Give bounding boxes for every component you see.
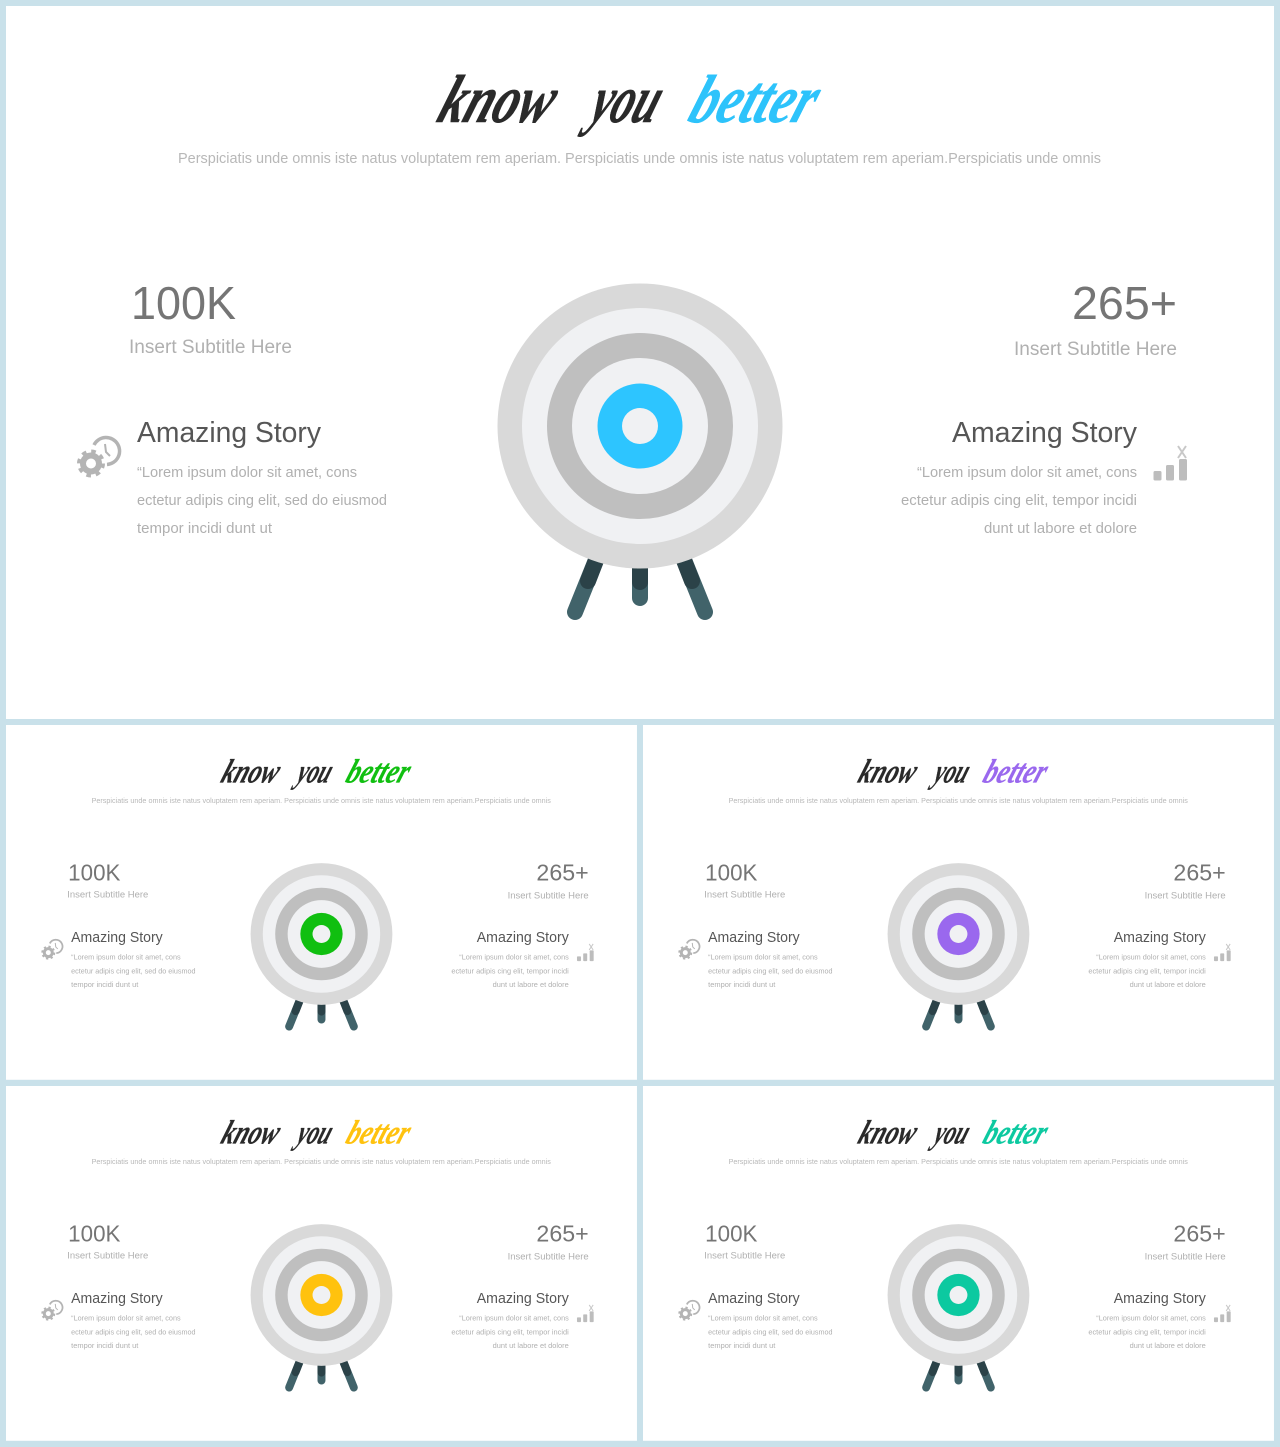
subtitle: Perspiciatis unde omnis iste natus voluptatem rem aperiam. Perspiciatis unde omnis iste natus voluptatem rem aperiam.Perspiciatis unde omnis xyxy=(729,1157,1188,1166)
legs xyxy=(289,1357,354,1388)
story right: “Lorem ipsum dolor sit amet, cons xyxy=(1096,1313,1206,1322)
panel: purple slide xyxy=(643,725,1274,1080)
stat label left: Insert Subtitle Here xyxy=(67,1251,148,1262)
title xyxy=(217,753,417,790)
story left: ectetur adipis cing elit, sed do eiusmod xyxy=(71,966,196,975)
icon: gear and clock xyxy=(42,1301,63,1320)
stat label right: Insert Subtitle Here xyxy=(1014,339,1177,360)
story left: “Lorem ipsum dolor sit amet, cons xyxy=(71,952,181,961)
story right xyxy=(901,417,1137,537)
story right: ectetur adipis cing elit, tempor incidi xyxy=(1088,966,1206,975)
title: you xyxy=(927,753,976,790)
story left: “Lorem ipsum dolor sit amet, cons xyxy=(71,1313,181,1322)
icon: bars xyxy=(1214,944,1231,961)
legs xyxy=(926,996,991,1027)
story right: ectetur adipis cing elit, tempor incidi xyxy=(1088,1327,1206,1336)
story left xyxy=(708,1291,833,1350)
icon: gear and clock xyxy=(42,940,63,959)
story right: Amazing Story xyxy=(1114,1291,1207,1307)
title xyxy=(429,62,831,137)
story left xyxy=(708,930,833,989)
rings xyxy=(498,284,782,568)
icon: gear and clock xyxy=(679,940,700,959)
legs xyxy=(575,550,705,612)
target xyxy=(888,1224,1029,1388)
story right xyxy=(451,930,570,989)
story left: tempor incidi dunt ut xyxy=(708,1341,776,1350)
story right: ectetur adipis cing elit, tempor incidi xyxy=(451,1327,569,1336)
story left: tempor incidi dunt ut xyxy=(71,1341,139,1350)
story right: dunt ut labore et dolore xyxy=(493,980,569,989)
story left: Amazing Story xyxy=(71,1291,164,1307)
title: better xyxy=(680,62,831,137)
story left: Amazing Story xyxy=(137,417,321,449)
stat label right: Insert Subtitle Here xyxy=(1145,891,1226,902)
legs xyxy=(289,996,354,1027)
rings xyxy=(251,863,392,1005)
title: know xyxy=(217,1114,287,1151)
story right: dunt ut labore et dolore xyxy=(1130,1341,1206,1350)
title: know xyxy=(217,753,287,790)
story left: “Lorem ipsum dolor sit amet, cons xyxy=(708,1313,818,1322)
stat label left: Insert Subtitle Here xyxy=(67,890,148,901)
story right: “Lorem ipsum dolor sit amet, cons xyxy=(459,952,569,961)
title: you xyxy=(927,1114,976,1151)
icon: bars xyxy=(1154,446,1187,480)
story left: tempor incidi dunt ut xyxy=(708,980,776,989)
story right xyxy=(1088,930,1207,989)
icon: bars xyxy=(577,1305,594,1322)
legs xyxy=(926,1357,991,1388)
panel: yellow slide xyxy=(6,1086,637,1441)
story right xyxy=(451,1291,570,1350)
story right: Amazing Story xyxy=(952,417,1137,449)
story left xyxy=(137,417,387,537)
story left xyxy=(71,930,196,989)
title: you xyxy=(576,62,675,137)
story left: “Lorem ipsum dolor sit amet, cons xyxy=(708,952,818,961)
title: better xyxy=(342,753,417,790)
target xyxy=(251,863,392,1027)
story right: dunt ut labore et dolore xyxy=(1130,980,1206,989)
stat: 100K: 100K xyxy=(68,860,120,886)
story right: “Lorem ipsum dolor sit amet, cons xyxy=(459,1313,569,1322)
story right: Amazing Story xyxy=(477,1291,570,1307)
icon: bars xyxy=(1214,1305,1231,1322)
title: know xyxy=(429,62,570,137)
panel: blue slide xyxy=(6,6,1274,719)
story right: dunt ut labore et dolore xyxy=(984,520,1137,537)
story right: dunt ut labore et dolore xyxy=(493,1341,569,1350)
story right: Amazing Story xyxy=(477,930,570,946)
story right: Amazing Story xyxy=(1114,930,1207,946)
title: you xyxy=(290,1114,339,1151)
title xyxy=(854,753,1054,790)
target xyxy=(888,863,1029,1027)
title: know xyxy=(854,1114,924,1151)
title xyxy=(854,1114,1054,1151)
stat label right: Insert Subtitle Here xyxy=(508,891,589,902)
stat: 100K: 100K xyxy=(68,1221,120,1247)
title: better xyxy=(342,1114,417,1151)
title: know xyxy=(854,753,924,790)
stat: 100K: 100K xyxy=(705,860,757,886)
icon: bars xyxy=(577,944,594,961)
stat: 100K: 100K xyxy=(705,1221,757,1247)
subtitle: Perspiciatis unde omnis iste natus voluptatem rem aperiam. Perspiciatis unde omnis iste natus voluptatem rem aperiam.Perspiciatis unde omnis xyxy=(92,1157,551,1166)
stat: 265+: 265+ xyxy=(1173,1221,1226,1247)
story left: ectetur adipis cing elit, sed do eiusmod xyxy=(137,492,387,509)
rings xyxy=(888,1224,1029,1366)
story right: “Lorem ipsum dolor sit amet, cons xyxy=(1096,952,1206,961)
subtitle: Perspiciatis unde omnis iste natus voluptatem rem aperiam. Perspiciatis unde omnis iste natus voluptatem rem aperiam.Perspiciatis unde omnis xyxy=(729,796,1188,805)
stat: 100K: 100K xyxy=(131,277,236,329)
story right xyxy=(1088,1291,1207,1350)
title: better xyxy=(979,753,1054,790)
subtitle: Perspiciatis unde omnis iste natus voluptatem rem aperiam. Perspiciatis unde omnis iste natus voluptatem rem aperiam.Perspiciatis unde omnis xyxy=(92,796,551,805)
stat label left: Insert Subtitle Here xyxy=(704,890,785,901)
story left: Amazing Story xyxy=(708,1291,801,1307)
target xyxy=(251,1224,392,1388)
panel: green slide xyxy=(6,725,637,1080)
stat label right: Insert Subtitle Here xyxy=(508,1252,589,1263)
story left: ectetur adipis cing elit, sed do eiusmod xyxy=(71,1327,196,1336)
rings xyxy=(888,863,1029,1005)
stat label right: Insert Subtitle Here xyxy=(1145,1252,1226,1263)
story right: ectetur adipis cing elit, tempor incidi xyxy=(901,492,1137,509)
icon: gear and clock xyxy=(679,1301,700,1320)
story left: tempor incidi dunt ut xyxy=(137,520,273,537)
story left: “Lorem ipsum dolor sit amet, cons xyxy=(137,464,357,481)
title: you xyxy=(290,753,339,790)
story left: ectetur adipis cing elit, sed do eiusmod xyxy=(708,1327,833,1336)
story left: Amazing Story xyxy=(708,930,801,946)
stat label left: Insert Subtitle Here xyxy=(704,1251,785,1262)
icon: gear and clock xyxy=(79,438,120,476)
story left: Amazing Story xyxy=(71,930,164,946)
story right: “Lorem ipsum dolor sit amet, cons xyxy=(917,464,1137,481)
story left: ectetur adipis cing elit, sed do eiusmod xyxy=(708,966,833,975)
target xyxy=(498,284,782,612)
stat: 265+: 265+ xyxy=(1173,860,1226,886)
rings xyxy=(251,1224,392,1366)
stat: 265+: 265+ xyxy=(536,860,589,886)
story left: tempor incidi dunt ut xyxy=(71,980,139,989)
story right: ectetur adipis cing elit, tempor incidi xyxy=(451,966,569,975)
title xyxy=(217,1114,417,1151)
stat: 265+: 265+ xyxy=(1072,277,1177,329)
title: better xyxy=(979,1114,1054,1151)
stat: 265+: 265+ xyxy=(536,1221,589,1247)
stat label left: Insert Subtitle Here xyxy=(129,337,292,358)
story left xyxy=(71,1291,196,1350)
panel: teal slide xyxy=(643,1086,1274,1441)
subtitle: Perspiciatis unde omnis iste natus voluptatem rem aperiam. Perspiciatis unde omnis iste natus voluptatem rem aperiam.Perspiciatis unde omnis xyxy=(178,150,1101,167)
